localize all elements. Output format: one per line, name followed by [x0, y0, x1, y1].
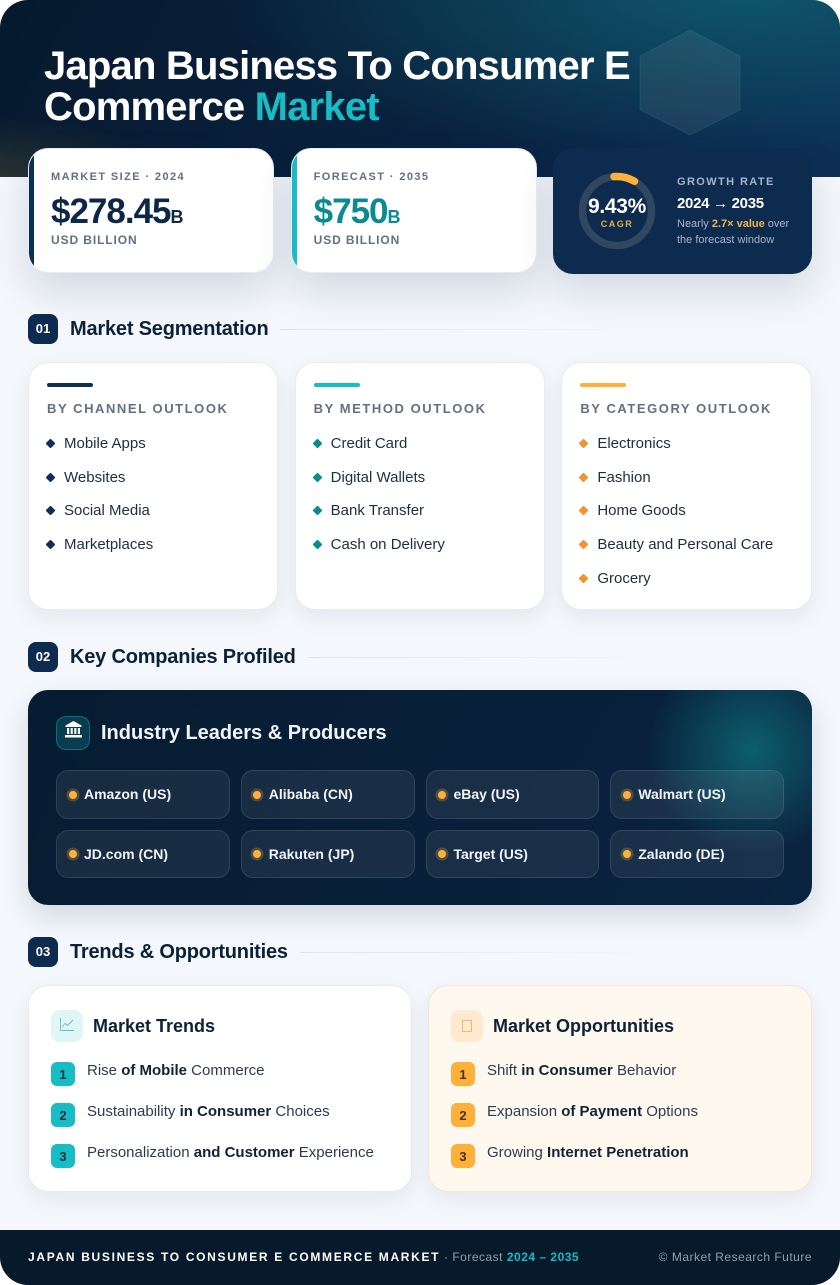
panel: market trends: Rise of Mobile Commerce	[87, 1062, 265, 1079]
panel: market trends: 3	[59, 1149, 67, 1164]
stat card: market size	[28, 148, 274, 273]
panel: category outlook: Home Goods	[597, 502, 686, 519]
panel: market opportunities: Growing Internet Penetration	[487, 1144, 689, 1161]
panel: market trends	[28, 985, 412, 1192]
hexagon decoration	[640, 30, 740, 136]
panel: market opportunities: 3	[459, 1149, 467, 1164]
panel: method outlook: Bank Transfer	[331, 502, 424, 519]
section heading 01: Market Segmentation	[70, 318, 268, 340]
stat card: market size: USD BILLION	[51, 233, 138, 247]
panel: category outlook: Beauty and Personal Care	[597, 536, 773, 553]
footer credit: © Market Research Future	[659, 1250, 812, 1264]
stat card: market size: MARKET SIZE · 2024	[51, 171, 185, 183]
panel: category outlook: Electronics	[597, 435, 671, 452]
panel: category outlook: Fashion	[597, 469, 651, 486]
company chips: Walmart (US)	[638, 786, 726, 802]
panel: category outlook	[561, 362, 812, 610]
panel: method outlook: Digital Wallets	[331, 469, 425, 486]
cagr ring	[578, 172, 656, 250]
growth label: GROWTH RATE	[677, 176, 775, 188]
panel: market trends: Personalization and Customer Experience	[87, 1144, 374, 1161]
section heading 01	[28, 314, 520, 344]
company chips	[56, 770, 784, 878]
panel: channel outlook	[28, 362, 278, 610]
stat card: forecast: USD BILLION	[314, 233, 400, 247]
panel: industry leaders	[28, 690, 812, 905]
company chips: Amazon (US)	[84, 786, 171, 802]
header banner	[0, 0, 840, 177]
company chips: Target (US)	[454, 846, 528, 862]
growth note: the forecast window	[677, 234, 774, 246]
panel: channel outlook: Mobile Apps	[64, 435, 146, 452]
panel: method outlook: BY METHOD OUTLOOK	[314, 401, 487, 416]
panel title: Industry Leaders & Producers	[101, 722, 387, 744]
stat card: forecast: FORECAST · 2035	[314, 171, 429, 183]
opportunities title: Market Opportunities	[493, 1016, 674, 1036]
section heading 01: 01	[36, 321, 50, 336]
panel: method outlook: Cash on Delivery	[331, 536, 445, 553]
title: Japan Business To Consumer E	[44, 44, 630, 88]
panel: market opportunities: 1	[459, 1067, 467, 1082]
panel: method outlook	[295, 362, 545, 610]
section heading 03: 03	[36, 944, 50, 959]
section heading 02	[28, 642, 536, 672]
cagr label: CAGR	[601, 219, 633, 229]
growth years: 2024 → 2035	[677, 195, 764, 212]
icon: bank	[56, 716, 90, 750]
cagr value: 9.43%	[588, 195, 646, 218]
company chips: Alibaba (CN)	[269, 786, 353, 802]
company chips: eBay (US)	[454, 786, 520, 802]
panel: market trends: 2	[59, 1108, 67, 1123]
growth note	[677, 218, 789, 246]
title: Commerce Market	[44, 85, 379, 129]
panel: category outlook: Grocery	[597, 570, 651, 587]
panel: channel outlook: Social Media	[64, 502, 150, 519]
stat card: forecast: $750B	[314, 192, 401, 231]
header bottom-left glow	[0, 117, 180, 177]
footer	[0, 1230, 840, 1285]
section heading 02: Key Companies Profiled	[70, 646, 296, 668]
growth note: Nearly 2.7× value over	[677, 218, 789, 230]
panel: market opportunities: Shift in Consumer Behavior	[487, 1062, 676, 1079]
panel: market opportunities: 2	[459, 1108, 467, 1123]
growth rate card	[553, 148, 812, 274]
panel: channel outlook: BY CHANNEL OUTLOOK	[47, 401, 228, 416]
panel: category outlook: BY CATEGORY OUTLOOK	[580, 401, 772, 416]
section heading 03	[28, 937, 532, 967]
company chips: JD.com (CN)	[84, 846, 168, 862]
footer title: JAPAN BUSINESS TO CONSUMER E COMMERCE MARKET · Forecast 2024 – 2035	[28, 1250, 579, 1264]
panel: market opportunities: Expansion of Payment Options	[487, 1103, 698, 1120]
panel: market opportunities	[428, 985, 812, 1192]
title	[44, 44, 630, 129]
company chips: Rakuten (JP)	[269, 846, 354, 862]
panel: channel outlook: Websites	[64, 469, 125, 486]
icon: chart	[51, 1010, 83, 1042]
panel: method outlook: Credit Card	[331, 435, 407, 452]
panel: channel outlook: Marketplaces	[64, 536, 153, 553]
stat card: market size: $278.45B	[51, 192, 184, 231]
panel: market trends: 1	[59, 1067, 67, 1082]
trends title: Market Trends	[93, 1016, 215, 1036]
section heading 03: Trends & Opportunities	[70, 941, 288, 963]
panel: market trends: Sustainability in Consumer Choices	[87, 1103, 330, 1120]
icon: missing glyph box	[451, 1010, 483, 1042]
company chips: Zalando (DE)	[638, 846, 725, 862]
section heading 02: 02	[36, 649, 50, 664]
stat card: forecast	[291, 148, 537, 273]
